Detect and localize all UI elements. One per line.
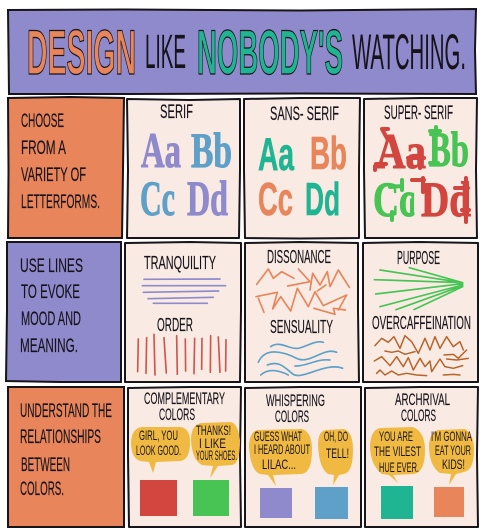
speech bubble: guess what [249, 428, 312, 486]
sans letters [258, 127, 347, 225]
panel: use lines: MOOD AND [21, 309, 81, 330]
serif letters: Bb [191, 122, 232, 178]
heading: sensuality: SENSUALITY [270, 317, 333, 337]
super-serif letters: Cc [373, 171, 415, 227]
speech bubble: vilest hue: HUE EVER. [379, 459, 419, 475]
panel: understand colors [8, 387, 124, 527]
super-serif letters: Dd [421, 171, 471, 227]
sans letters: Cc [258, 173, 293, 225]
heading: whispering colors: WHISPERING [266, 391, 325, 410]
heading: complementary colors: COMPLEMENTARY [144, 389, 225, 408]
speech bubble: guess what: LILAC... [262, 456, 296, 472]
swatch: orange [434, 487, 464, 517]
speech bubble: eat your kids: KIDS! [442, 456, 465, 472]
swatch: blue [315, 487, 348, 519]
swatch: green [193, 480, 229, 516]
heading: serif: SERIF [160, 102, 193, 123]
panel: choose letterforms: LETTERFORMS. [21, 192, 100, 213]
panel: understand colors: COLORS. [20, 479, 64, 500]
panel: sans-serif [244, 98, 360, 238]
sans letters: Bb [310, 127, 347, 179]
swatch: teal [381, 486, 413, 519]
text: YOUR SHOES. [196, 447, 237, 463]
sans letters: Aa [258, 128, 294, 180]
speech bubble: vilest hue [370, 427, 425, 483]
panel: serif [127, 99, 240, 238]
swatch: red [140, 480, 177, 516]
heading: dissonance: DISSONANCE [267, 247, 331, 267]
heading: sans-serif: SANS- SERIF [270, 104, 339, 125]
speech bubble: girl: GIRL, YOU [139, 427, 178, 443]
swatch: purple [260, 488, 292, 518]
panel: choose letterforms: FROM A [21, 138, 66, 159]
heading: order: ORDER [157, 315, 193, 335]
panel: archrival colors [365, 387, 478, 527]
lines: sensuality [258, 342, 343, 376]
panel: complementary colors [128, 387, 241, 527]
speech bubble: oh do tell: TELL! [326, 445, 349, 461]
heading: archrival colors [395, 390, 450, 425]
serif letters: Cc [140, 170, 175, 226]
speech bubble: vilest hue: THE VILEST [374, 443, 421, 459]
heading: tranquility: TRANQUILITY [144, 253, 216, 273]
lines: purpose [374, 268, 463, 310]
panel: purpose and overcaffeination [363, 242, 478, 382]
serif letters [140, 122, 232, 226]
heading: whispering colors [266, 391, 325, 426]
lines: tranquility [142, 279, 226, 303]
speech bubble: vilest hue: YOU ARE [379, 428, 413, 444]
lines: overcaffeination [374, 336, 468, 376]
panel: choose letterforms [8, 97, 124, 238]
speech bubble: guess what: I HEARD ABOUT [254, 441, 310, 457]
serif letters: Aa [141, 122, 181, 178]
title banner: LIKE [145, 26, 186, 79]
sans letters: Dd [305, 173, 340, 225]
lines: order [138, 334, 226, 375]
super-serif letters: Aa [376, 123, 426, 179]
serif letters: Dd [187, 170, 228, 226]
heading: whispering colors: COLORS [275, 407, 309, 426]
speech bubble: thanks: I LIKE [199, 435, 226, 451]
speech bubble: thanks [191, 422, 240, 478]
speech bubble: eat your kids [429, 428, 474, 485]
heading: purpose: PURPOSE [397, 248, 440, 268]
lines: dissonance [256, 269, 349, 314]
panel: whispering colors [245, 387, 361, 527]
speech bubble: girl: LOOK GOOD. [136, 442, 181, 458]
speech bubble: oh do tell [318, 428, 353, 485]
panel: tranquility and order [125, 242, 241, 382]
speech bubble: thanks: THANKS! [196, 422, 231, 438]
panel: understand colors: BETWEEN [21, 455, 70, 476]
heading: complementary colors [144, 389, 225, 424]
panel: choose letterforms: VARIETY OF [21, 165, 86, 186]
panel: use lines: MEANING. [20, 336, 78, 357]
title banner [8, 9, 476, 94]
panel: choose letterforms: CHOOSE [21, 111, 64, 132]
speech bubble: guess what: GUESS WHAT [254, 428, 302, 444]
super-serif letters [373, 121, 471, 227]
heading: complementary colors: COLORS [159, 405, 195, 424]
speech bubble: girl [131, 427, 190, 473]
panel: use lines [6, 242, 121, 382]
panel: use lines: USE LINES [20, 256, 83, 277]
panel: use lines: TO EVOKE [21, 282, 80, 303]
panel: dissonance and sensuality [245, 242, 359, 382]
panel: understand colors: RELATIONSHIPS [20, 427, 101, 448]
title banner: DESIGN [27, 18, 136, 88]
heading: archrival colors: COLORS [401, 406, 436, 425]
panel: super-serif [364, 98, 477, 238]
speech bubble: oh do tell: OH, DO [324, 428, 348, 444]
panel: understand colors: UNDERSTAND THE [20, 401, 112, 422]
